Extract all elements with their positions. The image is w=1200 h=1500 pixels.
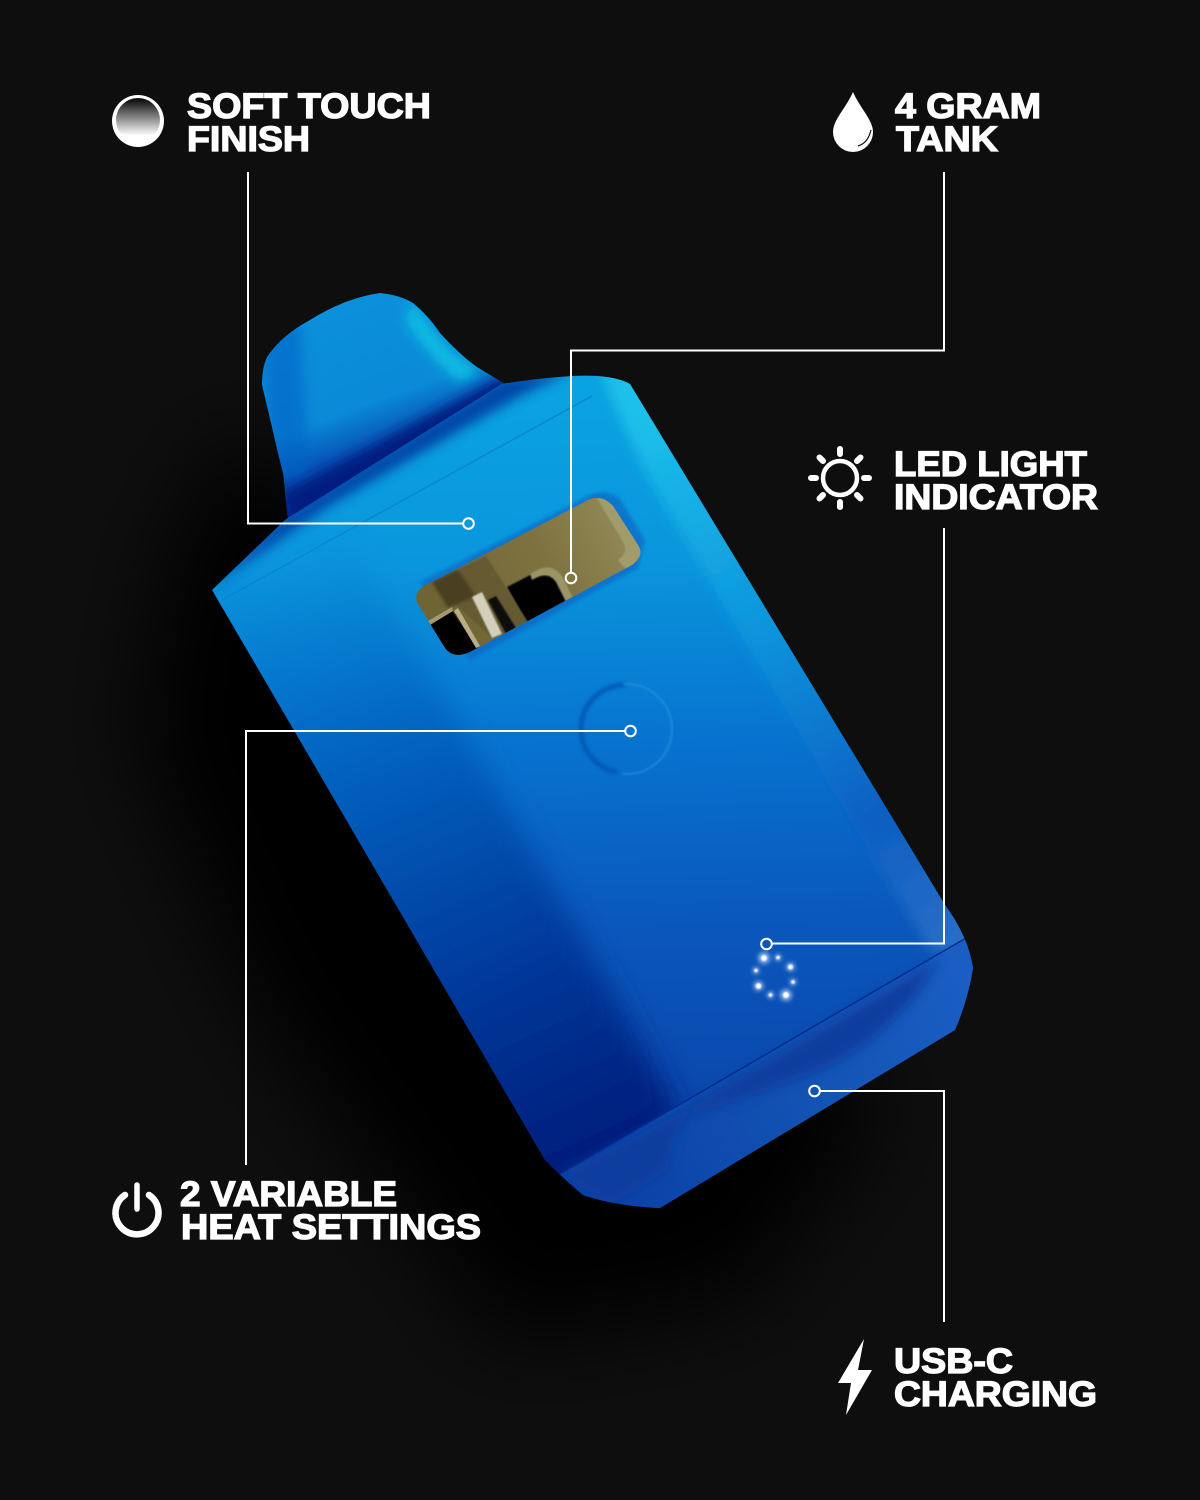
- callout line: heat settings: [246, 726, 636, 1165]
- device drop shadow: [140, 430, 880, 1340]
- heading: LED light indicator: LED LIGHT: [894, 445, 1087, 484]
- heading: 2 variable heat settings: [180, 1175, 481, 1247]
- device window: [416, 491, 646, 660]
- device body: [200, 360, 1000, 1220]
- heading: LED light indicator: INDICATOR: [894, 478, 1098, 517]
- icon: sun: [811, 449, 869, 507]
- window dark recess: [506, 574, 570, 622]
- icon: lightning bolt: [838, 1339, 872, 1415]
- heading: 2 variable heat settings: 2 VARIABLE: [180, 1175, 397, 1214]
- heading: 4 gram tank: 4 GRAM: [895, 87, 1041, 126]
- icon: power: [116, 1185, 159, 1234]
- device illustration: [200, 285, 1000, 1220]
- device mouthpiece cap: [262, 293, 504, 518]
- LED indicator dots: [752, 952, 796, 1001]
- device power button: [574, 678, 676, 780]
- heading: USB-C charging: CHARGING: [894, 1375, 1097, 1414]
- device base section: [560, 938, 990, 1215]
- heading: 2 variable heat settings: HEAT SETTINGS: [181, 1208, 481, 1247]
- icon: water drop: [833, 92, 873, 152]
- heading: 4 gram tank: [895, 87, 1041, 159]
- icon: soft touch sphere: [112, 95, 164, 147]
- heading: soft touch finish: [187, 87, 431, 159]
- heading: LED light indicator: [894, 445, 1098, 517]
- device shoulder shading: [205, 370, 572, 590]
- callout line: LED: [761, 528, 944, 949]
- callout line: tank: [566, 172, 944, 583]
- heading: USB-C charging: USB-C: [894, 1342, 1013, 1381]
- heading: soft touch finish: SOFT TOUCH: [187, 87, 431, 126]
- heading: 4 gram tank: TANK: [896, 120, 998, 159]
- callout line: soft touch: [248, 172, 474, 529]
- heading: soft touch finish: FINISH: [187, 120, 310, 159]
- heading: USB-C charging: [894, 1342, 1097, 1414]
- callout line: USB-C: [809, 1086, 944, 1322]
